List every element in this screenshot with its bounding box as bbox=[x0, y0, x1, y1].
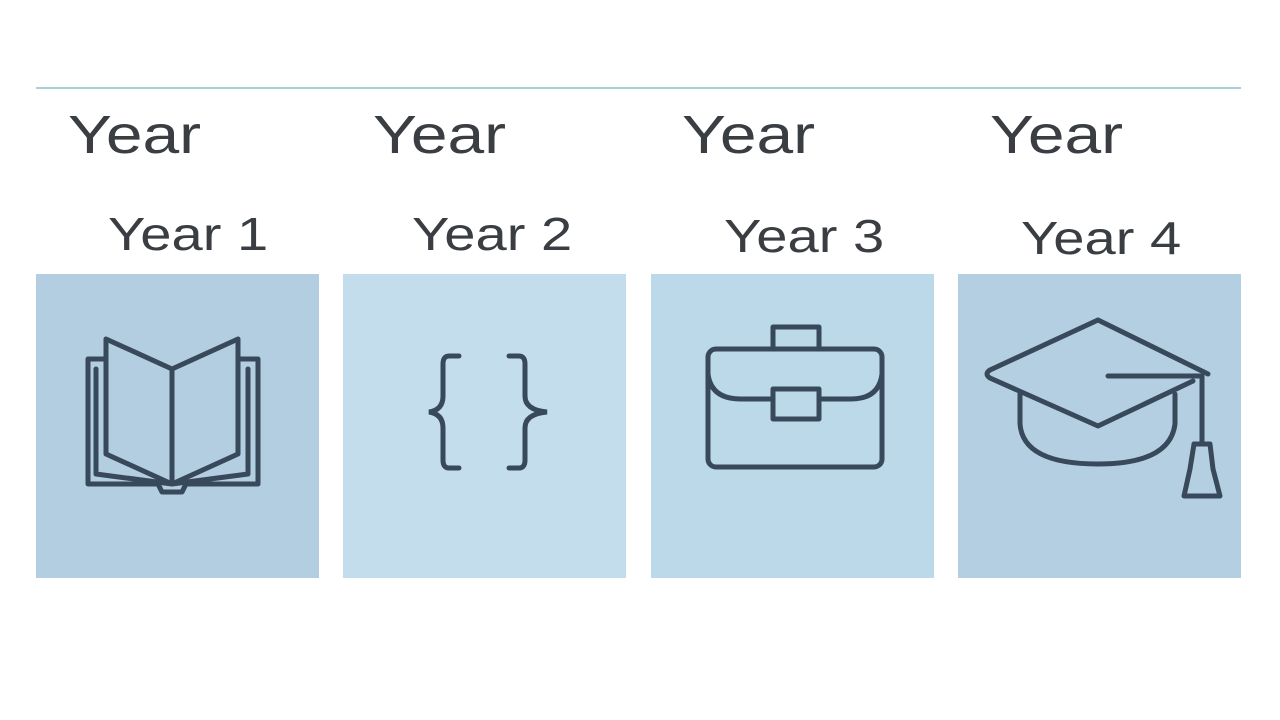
heading: Year 1 top: Year bbox=[68, 105, 201, 165]
panel: year 4 graduation bbox=[958, 274, 1241, 578]
heading: Year 4 top: Year bbox=[990, 105, 1123, 165]
heading: Year 3 top: Year bbox=[682, 105, 815, 165]
label: Year 1: Year 1 bbox=[108, 208, 268, 260]
label: Year 3: Year 3 bbox=[724, 210, 884, 262]
icon: graduation cap bbox=[984, 318, 1222, 498]
panel: year 1 book bbox=[36, 274, 319, 578]
panel: year 2 code bbox=[343, 274, 626, 578]
icon: briefcase bbox=[706, 324, 884, 470]
icon: curly braces bbox=[428, 354, 548, 470]
icon: book bbox=[86, 336, 260, 494]
heading: Year 2 top: Year bbox=[373, 105, 506, 165]
panel: year 3 briefcase bbox=[651, 274, 934, 578]
label: Year 2: Year 2 bbox=[412, 208, 572, 260]
label: Year 4: Year 4 bbox=[1021, 212, 1181, 264]
